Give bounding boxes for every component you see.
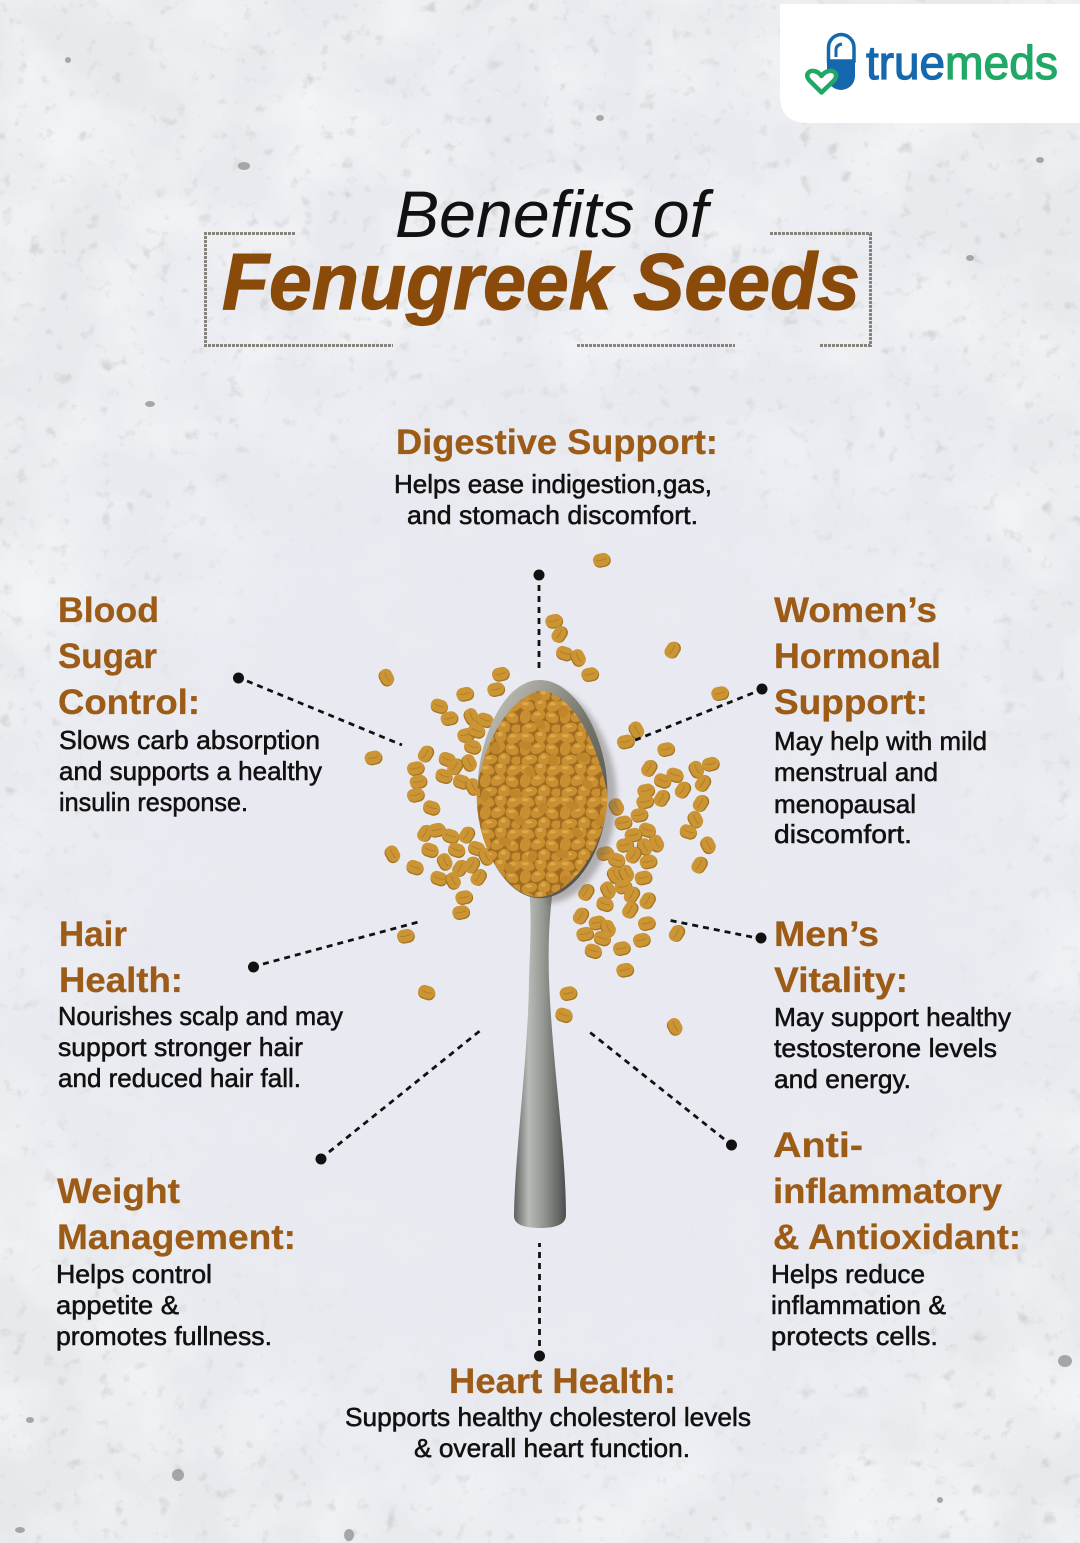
connector: weight management bbox=[316, 1030, 481, 1164]
spoon bowl bbox=[477, 680, 617, 903]
benefit: weight management bbox=[56, 1172, 296, 1351]
description: insulin response. bbox=[59, 787, 248, 817]
heading: Management: bbox=[57, 1218, 296, 1257]
loose seeds bbox=[363, 552, 730, 1038]
description: Helps control bbox=[56, 1259, 212, 1289]
title line: Benefits of: Benefits of bbox=[395, 177, 715, 251]
description: testosterone levels bbox=[774, 1033, 997, 1063]
description: May help with mild bbox=[774, 726, 987, 756]
heading: inflammatory bbox=[773, 1172, 1003, 1211]
connector: digestive support bbox=[534, 570, 544, 670]
benefit: men's vitality bbox=[774, 915, 1011, 1094]
description: and energy. bbox=[774, 1064, 911, 1094]
connector: women's hormonal support bbox=[633, 684, 768, 741]
description: Helps reduce bbox=[771, 1259, 925, 1289]
description: Slows carb absorption bbox=[59, 725, 320, 755]
description: Supports healthy cholesterol levels bbox=[345, 1402, 751, 1432]
title block bbox=[206, 177, 870, 346]
heading: Blood bbox=[58, 591, 159, 630]
benefit: digestive support bbox=[394, 423, 718, 530]
benefit: heart health bbox=[345, 1362, 751, 1463]
heading: Weight bbox=[57, 1172, 180, 1211]
description bbox=[56, 1259, 272, 1351]
connector: heart health bbox=[534, 1243, 545, 1362]
description: menopausal bbox=[774, 789, 916, 819]
title frame bbox=[206, 234, 870, 346]
description: and stomach discomfort. bbox=[407, 500, 698, 530]
heading bbox=[774, 591, 941, 722]
seed pile in bowl bbox=[477, 691, 607, 897]
logo wordmark: meds bbox=[945, 36, 1058, 89]
logo wordmark: true bbox=[866, 36, 945, 89]
description: inflammation & bbox=[771, 1290, 946, 1320]
description: May support healthy bbox=[774, 1002, 1011, 1032]
spoon handle bbox=[514, 888, 566, 1228]
heading: Anti- bbox=[773, 1126, 863, 1165]
heading: & Antioxidant: bbox=[773, 1218, 1021, 1257]
heading: Digestive Support: bbox=[396, 423, 718, 462]
description bbox=[774, 1002, 1011, 1094]
connector: anti-inflammatory bbox=[587, 1030, 737, 1150]
heading: Vitality: bbox=[774, 961, 908, 1000]
description: and reduced hair fall. bbox=[58, 1063, 301, 1093]
spoon with fenugreek seeds bbox=[363, 552, 730, 1228]
benefit: women's hormonal support bbox=[774, 591, 987, 849]
title line: Fenugreek Seeds: Fenugreek Seeds bbox=[222, 237, 860, 326]
heading: Health: bbox=[59, 961, 183, 1000]
description: support stronger hair bbox=[58, 1032, 303, 1062]
heading bbox=[59, 915, 183, 1000]
description: protects cells. bbox=[771, 1321, 938, 1351]
connector: hair health bbox=[248, 921, 422, 972]
heading: Sugar bbox=[58, 637, 157, 676]
heading: Control: bbox=[58, 683, 200, 722]
heading: Hormonal bbox=[774, 637, 941, 676]
heading: Heart Health: bbox=[449, 1362, 676, 1401]
benefit: hair health bbox=[58, 915, 343, 1093]
logo card: truemeds bbox=[780, 4, 1080, 123]
heading: Women’s bbox=[774, 591, 937, 630]
description: and supports a healthy bbox=[59, 756, 322, 786]
description bbox=[774, 726, 987, 849]
benefit: anti-inflammatory and antioxidant bbox=[771, 1126, 1021, 1351]
description bbox=[394, 469, 712, 530]
connector: men's vitality bbox=[668, 920, 766, 944]
logo wordmark bbox=[866, 36, 1058, 89]
description: Helps ease indigestion,gas, bbox=[394, 469, 712, 499]
heading bbox=[774, 915, 908, 1000]
heading: Men’s bbox=[774, 915, 879, 954]
description: Nourishes scalp and may bbox=[58, 1001, 343, 1031]
description bbox=[59, 725, 322, 817]
heading bbox=[57, 1172, 296, 1257]
description: & overall heart function. bbox=[414, 1433, 690, 1463]
heading: Hair bbox=[59, 915, 127, 954]
heading bbox=[773, 1126, 1021, 1257]
description: promotes fullness. bbox=[56, 1321, 272, 1351]
description: appetite & bbox=[56, 1290, 179, 1320]
description bbox=[771, 1259, 946, 1351]
icon: capsule with heart bbox=[807, 34, 855, 92]
heading bbox=[58, 591, 200, 722]
benefit: blood sugar control bbox=[58, 591, 322, 817]
description: menstrual and bbox=[774, 757, 938, 787]
description bbox=[58, 1001, 343, 1093]
description bbox=[345, 1402, 751, 1463]
connector: blood sugar control bbox=[233, 672, 402, 745]
description: discomfort. bbox=[774, 819, 912, 849]
heading: Support: bbox=[774, 683, 928, 722]
